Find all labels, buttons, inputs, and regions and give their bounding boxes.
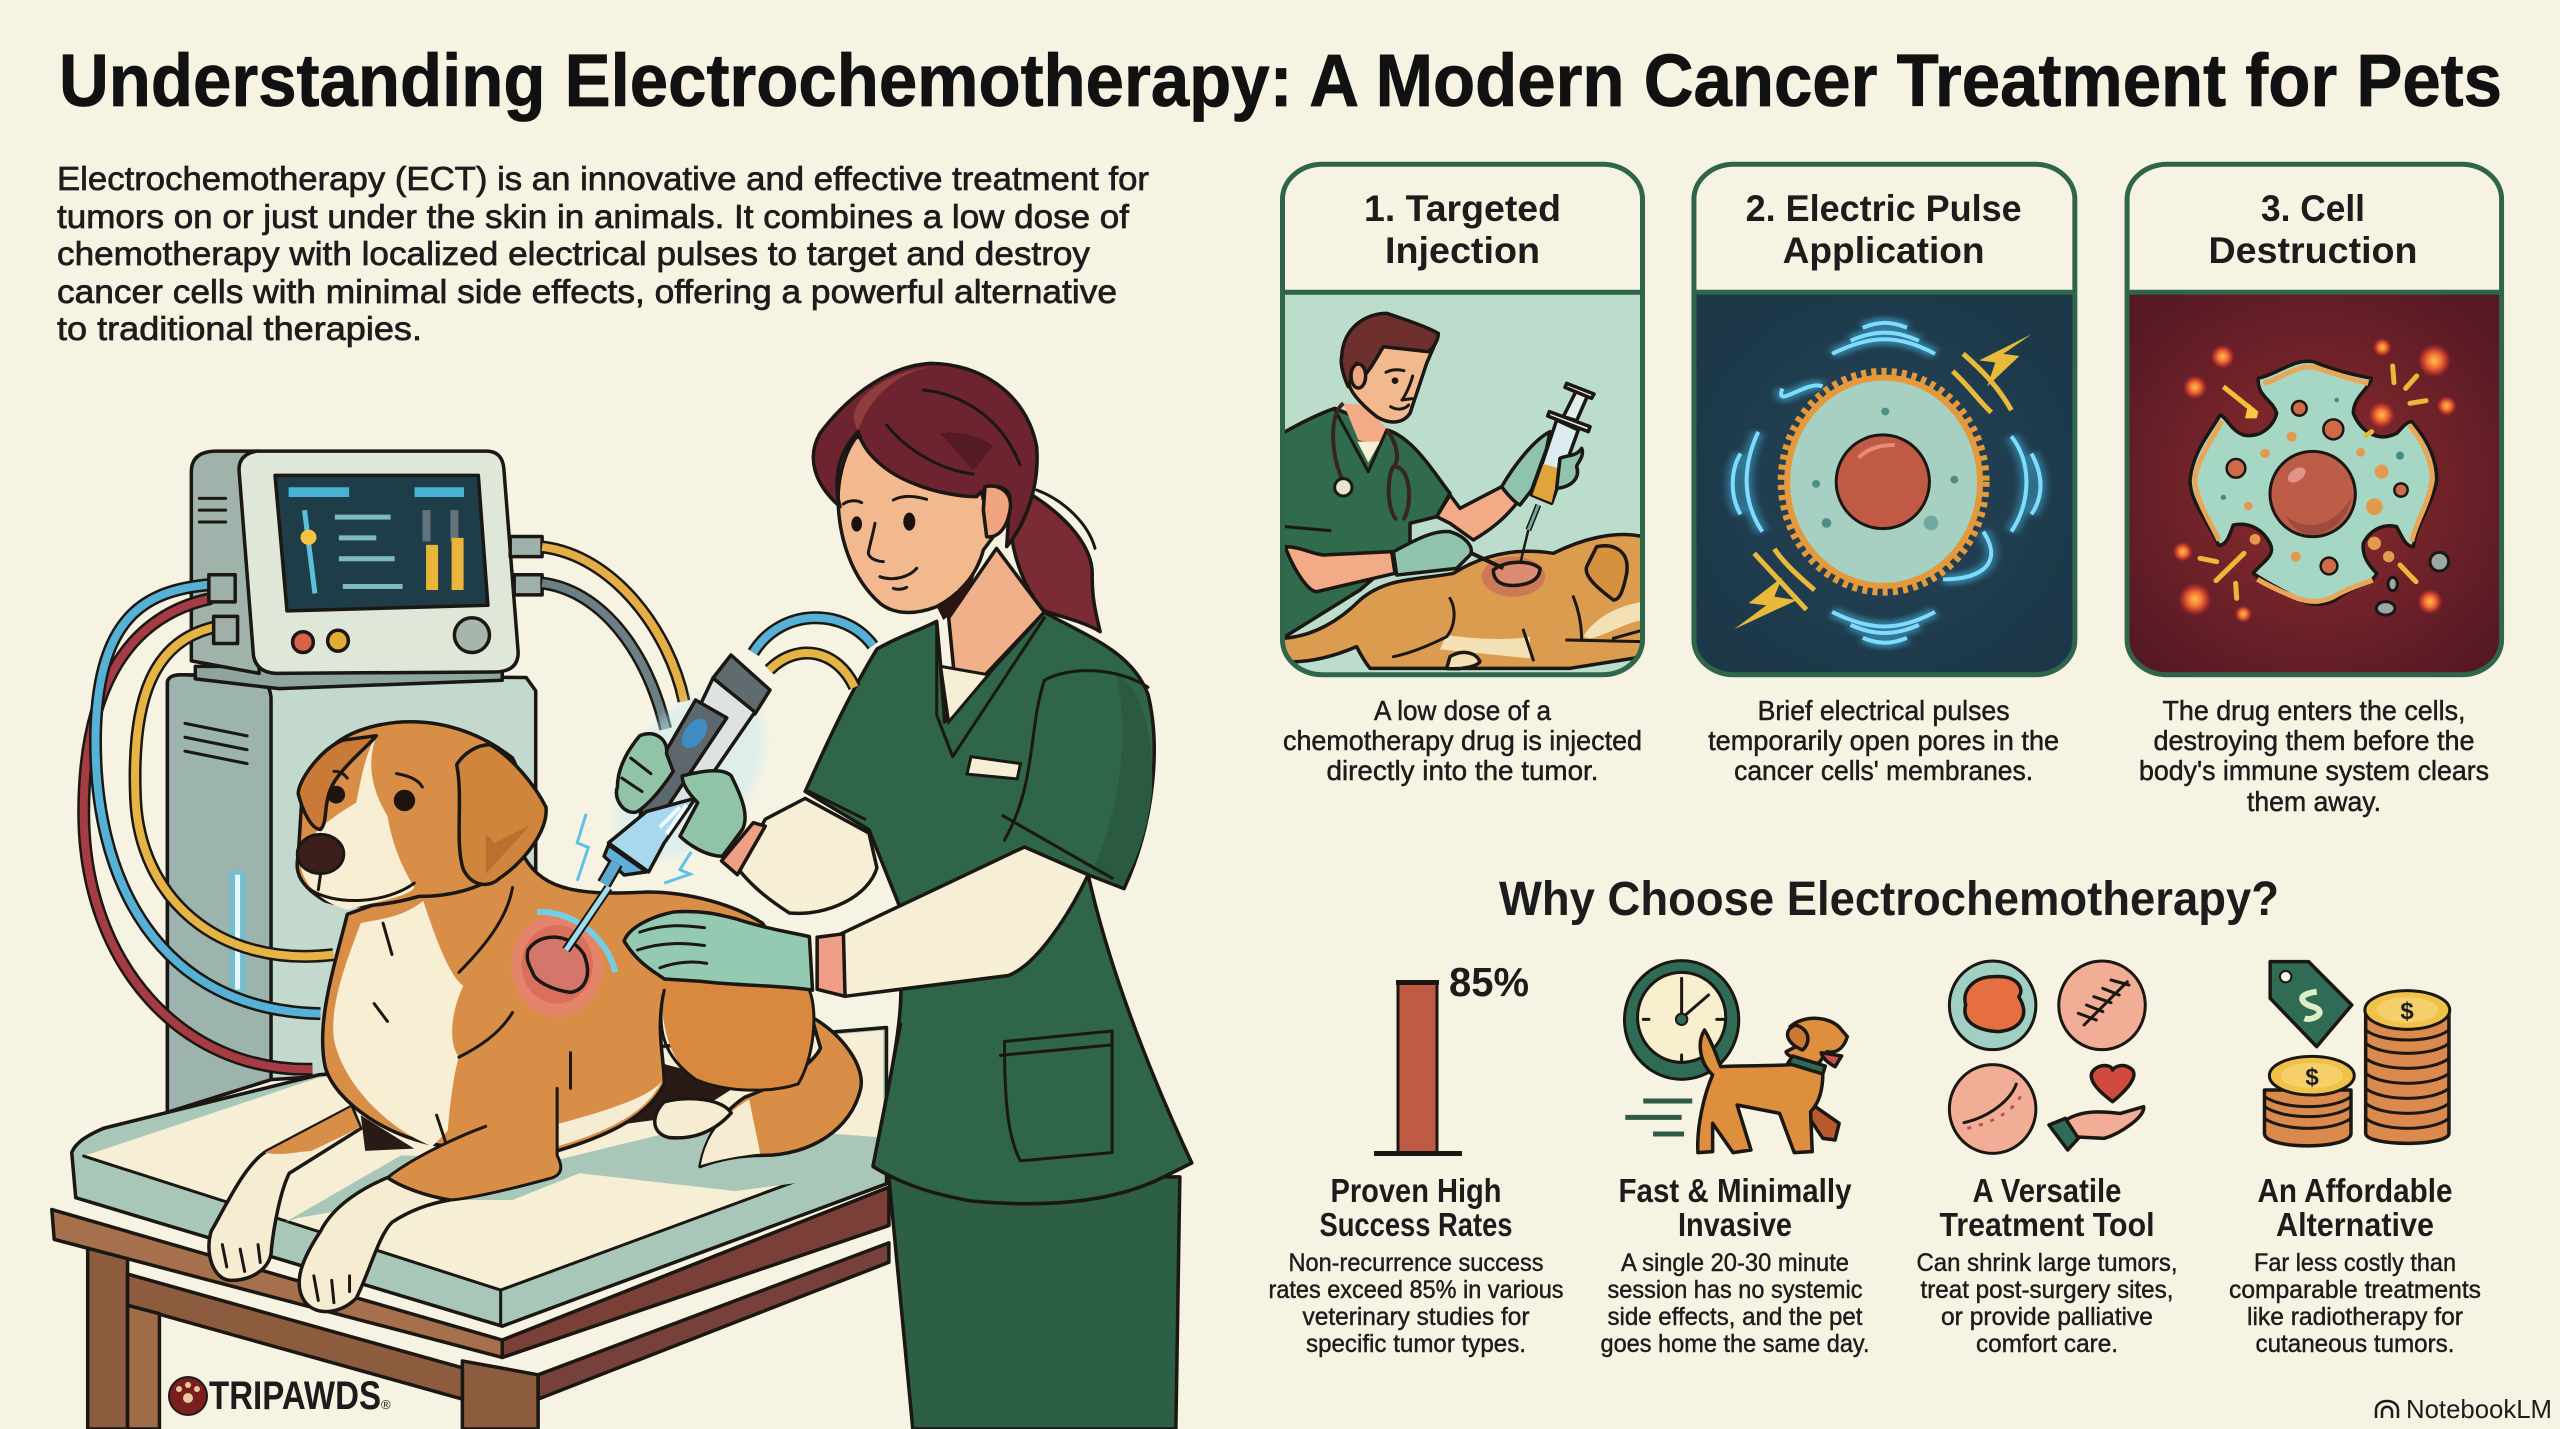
benefit 3 text <box>1916 1172 2178 1358</box>
step descriptions: cancer cells' membranes. <box>1734 755 2033 786</box>
benefit 2 text: session has no systemic <box>1608 1276 1862 1304</box>
benefit 3 text: comfort care. <box>1976 1330 2118 1358</box>
cell nucleus <box>2270 451 2355 537</box>
illustration: electroporation handpiece with gloved hands <box>566 618 873 990</box>
benefit 4 text: comparable treatments <box>2229 1276 2481 1304</box>
dog head <box>297 722 546 910</box>
benefit 3 text: A Versatile <box>1972 1172 2122 1209</box>
benefit 4 text: Far less costly than <box>2254 1249 2456 1277</box>
organelles <box>2227 401 2408 574</box>
step descriptions: The drug enters the cells, <box>2162 695 2466 726</box>
logo: Tripawds: TRIPAWDS <box>209 1374 381 1418</box>
released particles <box>2173 338 2457 623</box>
dog body <box>323 852 814 1151</box>
panel: step 2 electric pulse <box>1694 164 2075 675</box>
scar circle <box>1949 1065 2036 1153</box>
vet torso <box>1282 408 1450 638</box>
step descriptions: directly into the tumor. <box>1326 755 1598 786</box>
vet forearm and glove <box>1285 547 1395 592</box>
lightning bolts <box>1979 334 2031 386</box>
card headings: 2. Electric Pulse <box>1746 188 2022 229</box>
step descriptions: chemotherapy drug is injected <box>1283 725 1642 756</box>
intro text block: tumors on or just under the skin in animals. It combines a low dose of <box>57 198 1130 235</box>
vet scrubs top <box>805 612 1192 1204</box>
step descriptions: Brief electrical pulses <box>1758 695 2010 726</box>
step descriptions: body's immune system clears <box>2139 755 2489 786</box>
coin stacks <box>2264 991 2450 1146</box>
illustration: vet head <box>813 363 1095 620</box>
card headings: 3. Cell <box>2261 188 2365 229</box>
dog forelegs <box>209 1088 561 1312</box>
vet head <box>1348 340 1437 422</box>
text: coin dollar signs: $ <box>2305 1064 2319 1091</box>
benefit 4 text: An Affordable <box>2258 1172 2452 1209</box>
benefit 2 text: goes home the same day. <box>1600 1330 1870 1358</box>
benefit 2 text <box>1600 1172 1870 1358</box>
dog tail <box>700 1017 861 1167</box>
cell debris <box>2376 552 2449 615</box>
blue pulse arcs <box>1733 323 2040 643</box>
vet pants <box>889 1177 1180 1429</box>
heart in hand <box>2049 1066 2144 1150</box>
card headings <box>1364 188 2418 271</box>
vet ponytail and neck <box>941 493 1100 722</box>
benefit 1 text: specific tumor types. <box>1306 1330 1526 1358</box>
chart: 85% success bar <box>1374 959 1529 1156</box>
handpiece hoses <box>753 618 873 687</box>
step descriptions: A low dose of a <box>1374 695 1551 726</box>
text: coin dollar signs: $ <box>2400 998 2414 1025</box>
panel: step 1 targeted injection <box>1280 164 1647 677</box>
benefit 1 text: Success Rates <box>1320 1206 1512 1243</box>
tumor circle <box>1949 961 2036 1050</box>
icon: treatment uses <box>1949 961 2145 1153</box>
benefit 1 text: veterinary studies for <box>1302 1303 1530 1331</box>
step descriptions: destroying them before the <box>2154 725 2474 756</box>
benefit 1 text: rates exceed 85% in various <box>1268 1276 1564 1304</box>
cell nucleus <box>1836 435 1929 529</box>
benefit 1 text <box>1268 1172 1564 1358</box>
notebooklm watermark: NotebookLM <box>2406 1394 2552 1424</box>
illustration: electroporation machine and hoses <box>84 451 684 1112</box>
card headings: Destruction <box>2208 230 2418 271</box>
text: coin dollar signs <box>2305 998 2414 1091</box>
benefit 3 text: Can shrink large tumors, <box>1916 1249 2178 1277</box>
icon: price tag and coins <box>2264 962 2450 1146</box>
benefit 2 text: A single 20-30 minute <box>1621 1249 1849 1277</box>
icon: clock and running dog <box>1624 961 1847 1153</box>
intro text block <box>57 160 1149 347</box>
card headings: Application <box>1783 230 1985 271</box>
lower glove <box>624 911 813 990</box>
vet arms <box>721 798 1088 996</box>
chart: 85% success bar: 85% <box>1449 959 1529 1005</box>
cell membrane <box>1783 373 1984 590</box>
section heading: Why Choose Electrochemotherapy? <box>1499 873 2279 926</box>
intro text block: chemotherapy with localized electrical pulses to target and destroy <box>57 235 1091 272</box>
gripping gloves <box>616 734 673 812</box>
handpiece and syringe <box>566 678 813 990</box>
benefit 4 text: like radiotherapy for <box>2247 1303 2463 1331</box>
syringe <box>1502 383 1594 562</box>
ruptured cell <box>2190 361 2437 604</box>
step descriptions <box>1283 695 2489 817</box>
illustration: veterinarian in green scrubs <box>721 493 1192 1429</box>
price tag <box>2270 962 2352 1047</box>
benefit 4 text <box>2229 1172 2481 1358</box>
yellow drug arrow and streaks <box>2200 366 2426 598</box>
intro text block: Electrochemotherapy (ECT) is an innovative and effective treatment for <box>57 160 1149 197</box>
sutures circle <box>2059 961 2145 1050</box>
card headings: 1. Targeted <box>1364 188 1561 229</box>
benefit 1 text: Proven High <box>1330 1172 1502 1209</box>
step descriptions: temporarily open pores in the <box>1708 725 2059 756</box>
step descriptions: them away. <box>2247 786 2381 817</box>
dog <box>1282 535 1643 668</box>
benefit 3 text: treat post-surgery sites, <box>1920 1276 2174 1304</box>
benefit 3 text: Treatment Tool <box>1940 1206 2154 1243</box>
benefit 4 text: cutaneous tumors. <box>2256 1330 2454 1358</box>
benefit 2 text: Invasive <box>1678 1206 1792 1243</box>
benefit 3 text: or provide palliative <box>1941 1303 2153 1331</box>
benefit 2 text: Fast & Minimally <box>1618 1172 1852 1209</box>
panel: step 3 cell destruction <box>2120 164 2507 677</box>
stethoscope <box>1333 403 1409 520</box>
tumor <box>511 912 615 1017</box>
intro text block: cancer cells with minimal side effects, offering a powerful alternative <box>57 273 1117 310</box>
intro text block: to traditional therapies. <box>57 310 422 347</box>
card headings: Injection <box>1385 230 1540 271</box>
benefit 4 text: Alternative <box>2276 1206 2434 1243</box>
illustration: exam table with mattress <box>52 1028 889 1429</box>
logo: Tripawds: ® <box>381 1397 391 1412</box>
illustration: golden retriever patient with tumor <box>209 722 883 1312</box>
benefit 1 text: Non-recurrence success <box>1288 1249 1544 1277</box>
benefit 2 text: side effects, and the pet <box>1608 1303 1863 1331</box>
